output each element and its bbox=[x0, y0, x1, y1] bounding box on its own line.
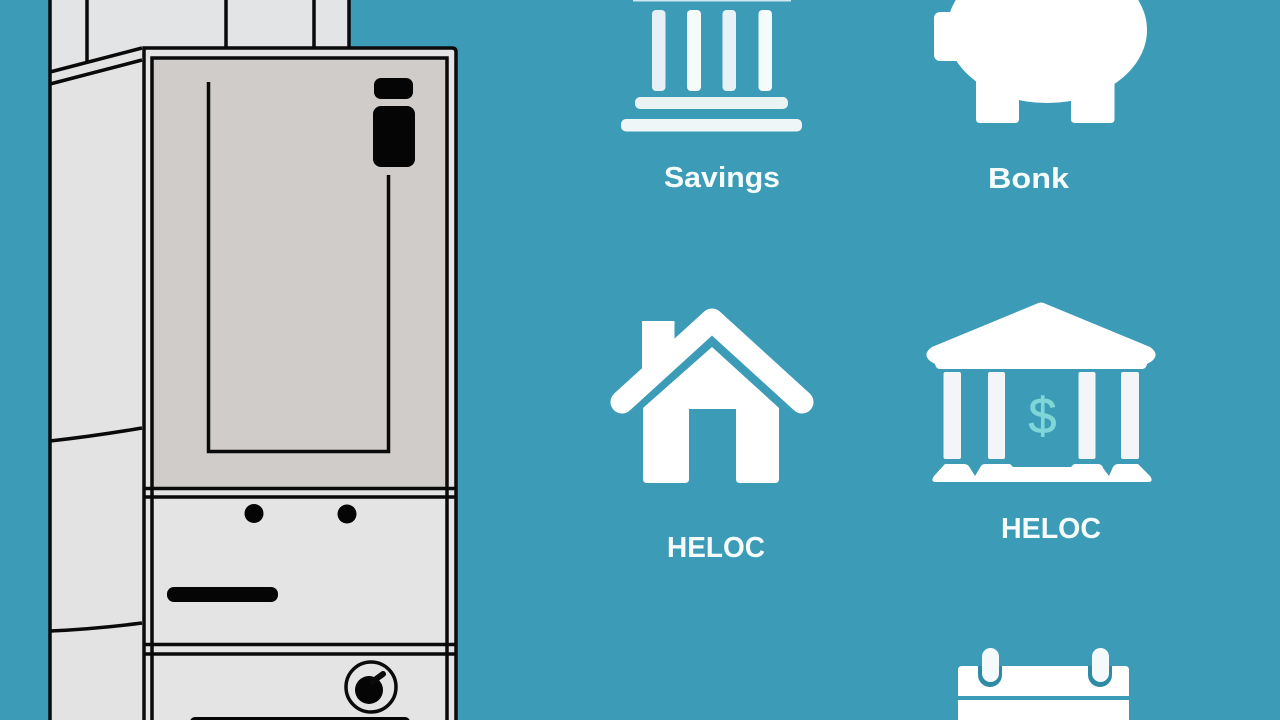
bottom bar bbox=[190, 717, 410, 720]
small control button bbox=[374, 78, 413, 99]
label: HELOC under house: HELOC bbox=[667, 532, 765, 564]
slot bar bbox=[167, 587, 278, 602]
label: HELOC under bank: HELOC bbox=[1001, 513, 1101, 545]
large control button bbox=[373, 106, 415, 167]
icon: calendar bbox=[958, 648, 1129, 720]
dial knob bbox=[346, 662, 396, 712]
label: Bonk: Bonk bbox=[988, 163, 1070, 195]
icon group: savings column bbox=[621, 0, 802, 132]
icon: bank with dollar sign bbox=[926, 302, 1156, 482]
door outline bbox=[208, 82, 388, 452]
right indicator dot bbox=[338, 504, 356, 524]
icon: piggy bank bbox=[934, 0, 1147, 123]
furnace body bbox=[144, 48, 456, 720]
illustration: furnace appliance bbox=[50, 0, 456, 720]
side panel bbox=[50, 48, 146, 720]
dollar sign: $ bbox=[1028, 387, 1056, 444]
icon: house bbox=[622, 320, 802, 483]
wall block behind appliance bbox=[50, 0, 349, 74]
label: Savings: Savings bbox=[664, 162, 780, 194]
left indicator dot bbox=[244, 504, 264, 523]
